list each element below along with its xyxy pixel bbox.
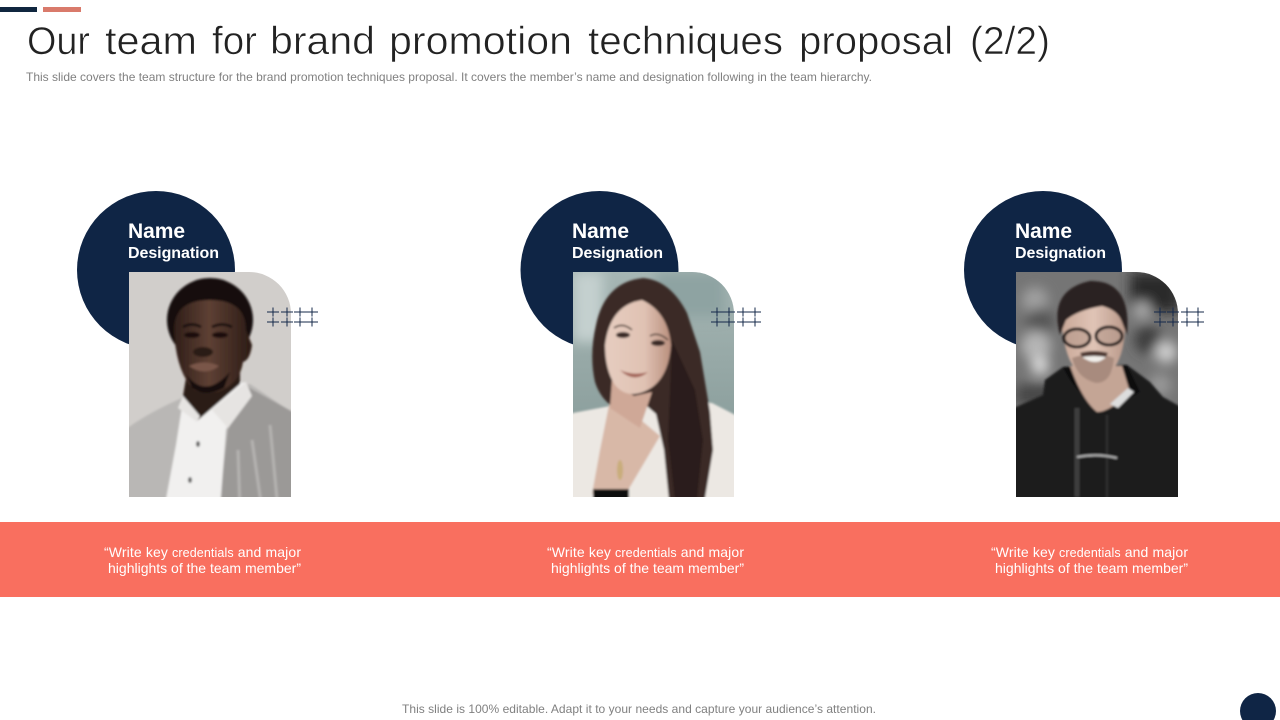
name and designation 2	[572, 220, 663, 262]
credentials text 2: highlights of the team member”	[551, 560, 744, 576]
name and designation 3	[1015, 220, 1106, 262]
credentials text 2: “Write key credentials and major	[547, 544, 744, 560]
panel: team member 3	[964, 191, 1204, 510]
title	[27, 20, 1050, 63]
top accent bars	[0, 7, 81, 12]
title: Our	[27, 20, 90, 63]
panel: team member 2	[520, 191, 761, 510]
name and designation 3: Name	[1015, 220, 1072, 243]
name and designation 1: Designation	[128, 245, 219, 262]
credentials text 1	[104, 544, 301, 576]
title: for	[212, 20, 257, 63]
credentials text 3: highlights of the team member”	[995, 560, 1188, 576]
decorative plus pattern 1	[267, 308, 318, 326]
decorative plus pattern 2	[711, 308, 761, 326]
title: team	[105, 20, 197, 63]
title: promotion	[389, 20, 572, 63]
name and designation 2: Designation	[572, 245, 663, 262]
name and designation 1: Name	[128, 220, 185, 243]
credentials text 1: highlights of the team member”	[108, 560, 301, 576]
decorative plus pattern 3	[1154, 308, 1204, 326]
corner circle	[1240, 693, 1276, 720]
credentials text 2	[547, 544, 744, 576]
portrait photo 2	[573, 272, 734, 497]
credentials text 1: “Write key credentials and major	[104, 544, 301, 560]
portrait photo 1	[129, 272, 291, 497]
title: techniques	[588, 20, 783, 63]
credentials text 3	[991, 544, 1188, 576]
title: brand	[270, 20, 375, 63]
credentials text 3: “Write key credentials and major	[991, 544, 1188, 560]
title: proposal	[799, 20, 953, 63]
portrait photo 3	[1016, 272, 1178, 497]
navy circle 3	[964, 191, 1122, 349]
navy circle 2	[520, 191, 678, 349]
credentials band	[0, 522, 1280, 597]
name and designation 3: Designation	[1015, 245, 1106, 262]
footer note: This slide is 100% editable. Adapt it to your needs and capture your audience’s attention.	[402, 702, 876, 716]
navy circle 1	[77, 191, 235, 349]
name and designation 1	[128, 220, 219, 262]
subtitle: This slide covers the team structure for the brand promotion techniques proposal. It covers the member’s name and designation following in the team hierarchy.	[26, 70, 872, 84]
title: (2/2)	[970, 20, 1050, 63]
panel: team member 1	[77, 191, 318, 510]
name and designation 2: Name	[572, 220, 629, 243]
